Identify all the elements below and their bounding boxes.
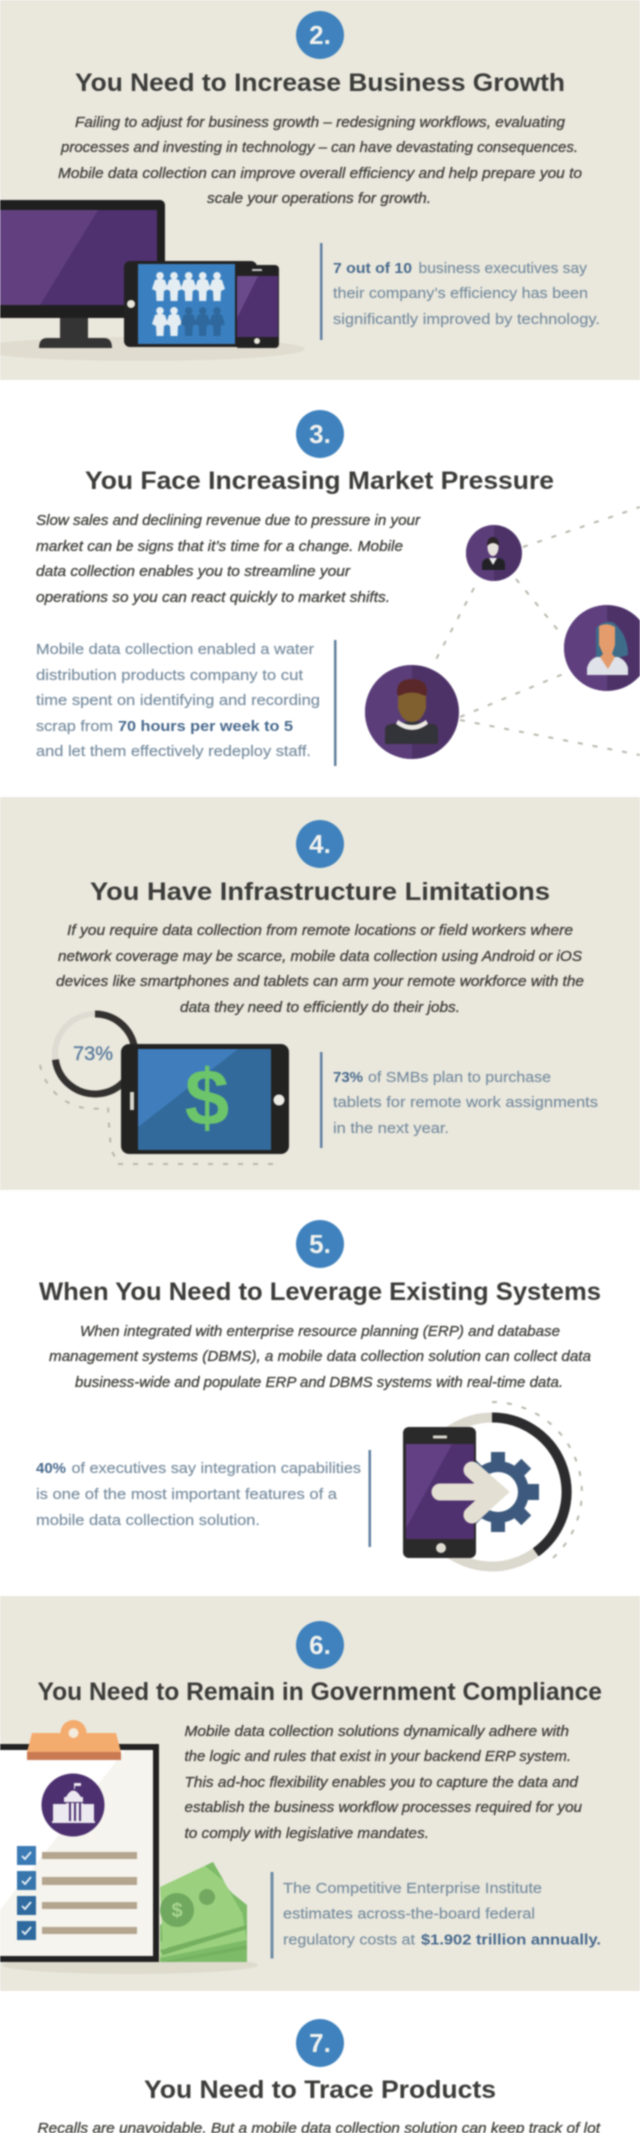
callout: regulatory costs stat: regulatory costs at — [283, 1932, 415, 1948]
callout: water distribution stat: Mobile data collection enabled a water — [36, 642, 314, 658]
callout: integration capabilities stat — [36, 1450, 371, 1547]
panel: section 4 infrastructure limitations — [0, 797, 640, 1190]
body text: When integrated with enterprise resource planning (ERP) and database — [80, 1324, 560, 1340]
body text: Mobile data collection can improve overall efficiency and help prepare you to — [58, 166, 582, 182]
callout: water distribution stat: time spent on identifying and recording — [36, 693, 320, 709]
number badge 6 — [296, 1621, 344, 1669]
callout: SMB tablets stat: of SMBs plan to purchase — [368, 1070, 551, 1086]
number badge 5: 5. — [309, 1229, 331, 1259]
body text: network coverage may be scarce, mobile data collection using Android or iOS — [58, 949, 582, 965]
number badge 2 — [296, 11, 344, 59]
callout: water distribution stat: distribution products company to cut — [36, 668, 303, 684]
callout: water distribution stat: and let them effectively redeploy staff. — [36, 744, 311, 760]
number badge 7 — [296, 2019, 344, 2067]
icon: person small — [466, 525, 522, 581]
callout: integration capabilities stat: mobile data collection solution. — [36, 1513, 260, 1529]
number badge 4: 4. — [309, 829, 331, 859]
panel: section 6 government compliance — [0, 1596, 640, 1991]
body text: Slow sales and declining revenue due to pressure in your — [36, 513, 421, 529]
body text: devices like smartphones and tablets can arm your remote workforce with the — [56, 974, 584, 990]
dashed connectors — [433, 507, 640, 755]
body text: business-wide and populate ERP and DBMS systems with real-time data. — [75, 1375, 563, 1391]
panel: section 3 market pressure — [0, 380, 640, 797]
callout: SMB tablets stat: 73% — [333, 1070, 363, 1086]
icon: tablet with people — [124, 261, 257, 347]
number badge 6: 6. — [309, 1630, 331, 1660]
heading: You Have Infrastructure Limitations — [90, 878, 550, 906]
ring chart 40% — [418, 1418, 567, 1566]
icon: smartphone — [235, 265, 279, 348]
icon: man — [365, 665, 459, 759]
callout: water distribution stat: scrap from — [36, 719, 113, 735]
callout: business executives stat: their company’s efficiency has been — [333, 286, 588, 302]
icon: government building badge — [42, 1774, 104, 1836]
callout: business executives stat: business executives say — [418, 261, 588, 277]
callout: water distribution stat: 70 hours per week to 5 — [118, 719, 293, 735]
clip — [27, 1720, 121, 1760]
callout: business executives stat: significantly improved by technology. — [333, 312, 600, 328]
body text: the logic and rules that exist in your backend ERP system. — [184, 1749, 571, 1765]
number badge 4 — [296, 820, 344, 868]
heading: You Need to Trace Products — [144, 2076, 496, 2104]
body text: data collection enables you to streamline your — [36, 564, 351, 580]
donut chart 73% — [55, 1014, 135, 1094]
body text — [49, 1324, 591, 1391]
callout: regulatory costs stat: The Competitive Enterprise Institute — [283, 1881, 542, 1897]
number badge 7: 7. — [309, 2028, 331, 2058]
body text — [36, 513, 421, 606]
illustration: phone, gear and 40 percent ring — [403, 1402, 582, 1566]
panel: section 7 trace products — [0, 1991, 640, 2133]
body text: processes and investing in technology – can have devastating consequences. — [60, 140, 578, 156]
icon: desktop monitor — [0, 200, 165, 348]
arrow into gear — [440, 1470, 497, 1515]
illustration: devices — [0, 200, 305, 361]
callout: SMB tablets stat: tablets for remote work assignments — [333, 1095, 598, 1111]
body text: scale your operations for growth. — [207, 191, 431, 207]
icon: tablet with dollar sign — [121, 1044, 289, 1154]
number badge 5 — [296, 1220, 344, 1268]
icon: tablet with dollar sign: $ — [185, 1053, 229, 1142]
panel: section 2 business growth — [0, 0, 640, 380]
body text: management systems (DBMS), a mobile data collection solution can collect data — [49, 1349, 591, 1365]
number badge 3: 3. — [309, 419, 331, 449]
heading: When You Need to Leverage Existing Systems — [39, 1278, 601, 1306]
icon: woman — [564, 605, 640, 691]
body text — [58, 115, 582, 207]
callout: integration capabilities stat: is one of the most important features of a — [36, 1487, 338, 1503]
dashed outline — [40, 1065, 280, 1164]
heading: You Face Increasing Market Pressure — [85, 467, 554, 495]
body text: Failing to adjust for business growth – redesigning workflows, evaluating — [75, 115, 566, 131]
illustration: clipboard — [0, 1720, 159, 1962]
callout: integration capabilities stat: 40% — [36, 1461, 66, 1477]
body text — [56, 923, 584, 1016]
heading: You Need to Increase Business Growth — [75, 69, 565, 97]
callout: regulatory costs stat: estimates across-the-board federal — [283, 1906, 535, 1922]
number badge 2: 2. — [309, 20, 331, 50]
body text: Mobile data collection solutions dynamically adhere with — [184, 1724, 569, 1740]
network of people — [365, 507, 640, 759]
panel: section 5 existing systems — [0, 1190, 640, 1596]
checklist — [17, 1846, 137, 1940]
illustration: money stack: $ — [171, 1900, 183, 1922]
donut chart 73%: 73% — [73, 1044, 113, 1065]
callout: water distribution stat — [36, 640, 336, 766]
callout: business executives stat: 7 out of 10 — [333, 261, 412, 277]
body text: This ad-hoc flexibility enables you to capture the data and — [184, 1775, 579, 1791]
callout: integration capabilities stat: of executives say integration capabilities — [72, 1461, 361, 1477]
number badge 3 — [296, 410, 344, 458]
body text: If you require data collection from remote locations or field workers where — [67, 923, 573, 939]
body text — [184, 1724, 582, 1842]
heading: You Need to Remain in Government Compliance — [38, 1678, 602, 1706]
callout: SMB tablets stat: in the next year. — [333, 1121, 449, 1137]
callout: regulatory costs stat — [270, 1872, 601, 1958]
body text: market can be signs that it’s time for a change. Mobile — [36, 539, 403, 555]
illustration: money stack — [2, 1862, 258, 1974]
callout: SMB tablets stat — [320, 1052, 598, 1148]
icon: gear — [465, 1452, 539, 1532]
body text: to comply with legislative mandates. — [184, 1826, 429, 1842]
callout: business executives stat — [320, 243, 600, 340]
body text: establish the business workflow processes required for you — [184, 1800, 582, 1816]
icon: smartphone — [403, 1427, 476, 1558]
callout: regulatory costs stat: $1.902 trillion annually. — [421, 1932, 601, 1948]
body text: operations so you can react quickly to market shifts. — [36, 590, 390, 606]
body text: data they need to efficiently do their jobs. — [180, 1000, 460, 1016]
illustration: 73 percent donut and tablet — [40, 1014, 289, 1164]
